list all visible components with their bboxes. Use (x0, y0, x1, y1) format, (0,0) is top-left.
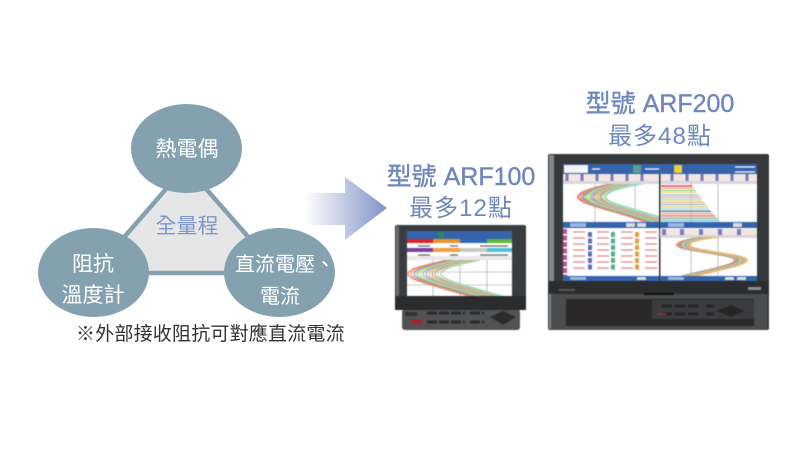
diagram: measurement input types (38, 104, 345, 345)
label: resistance thermometer (62, 252, 124, 307)
subheading: ARF200: 最多48點 (608, 123, 712, 150)
device: ARF100 recorder (394, 224, 527, 331)
heading: ARF100: 型號 ARF100 (387, 163, 535, 191)
label: DC voltage and current: 電流 (260, 286, 300, 308)
label: resistance thermometer: 溫度計 (62, 284, 124, 307)
label: resistance thermometer: 阻抗 (72, 253, 114, 276)
footnote: ※外部接收阻抗可對應直流電流 (76, 324, 345, 345)
label: full range: 全量程 (156, 215, 218, 238)
subheading: ARF100: 最多12點 (409, 195, 513, 222)
label: DC voltage and current: 直流電壓、 (235, 254, 335, 276)
heading: ARF200: 型號 ARF200 (586, 90, 734, 118)
device: ARF200 recorder (547, 153, 770, 331)
triangle and three circles (38, 104, 335, 317)
label: DC voltage and current (235, 254, 335, 308)
label: thermocouple: 熱電偶 (156, 138, 218, 161)
arrow (310, 177, 387, 240)
